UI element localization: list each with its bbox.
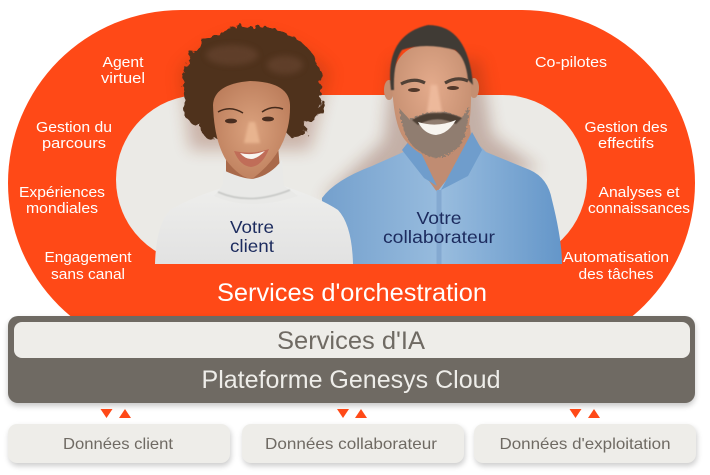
heading: services d'orchestration: Services d'orchestration	[217, 279, 487, 307]
nose	[244, 122, 260, 143]
beard	[399, 106, 469, 158]
brows	[218, 108, 283, 113]
arrows: données d'exploitation	[570, 409, 600, 418]
mustache	[412, 112, 462, 125]
panel: données collaborateur: Données collaborateur	[265, 436, 438, 453]
label: votre client: client	[230, 236, 274, 256]
labels: left capabilities: mondiales	[26, 201, 98, 217]
labels: right capabilities: des tâches	[578, 267, 654, 283]
labels: right capabilities: Gestion des	[584, 120, 668, 136]
labels: left capabilities: parcours	[42, 136, 106, 152]
label: votre collaborateur: collaborateur	[383, 227, 495, 247]
ears	[384, 80, 394, 100]
labels: left capabilities: Engagement	[44, 250, 132, 266]
text: services d'IA: Services d'IA	[277, 327, 425, 355]
panel: données d'exploitation	[474, 424, 697, 466]
labels: right capabilities: Automatisation	[563, 250, 669, 266]
person: collaborateur	[320, 25, 562, 264]
nose	[427, 85, 442, 112]
labels: right capabilities: Analyses et	[598, 185, 680, 201]
sweater	[155, 198, 353, 264]
neck	[422, 125, 471, 192]
mouth	[418, 120, 456, 135]
people photographs	[155, 25, 562, 264]
labels: left capabilities	[19, 55, 145, 283]
eyes	[225, 119, 237, 123]
label: votre client: Votre	[230, 217, 274, 237]
labels: right capabilities	[535, 55, 690, 283]
panel: données client	[8, 424, 231, 466]
labels: left capabilities: Agent	[102, 55, 144, 71]
labels: right capabilities: effectifs	[598, 136, 654, 152]
brows	[401, 79, 468, 84]
neck	[226, 150, 280, 179]
labels: right capabilities: Co-pilotes	[535, 55, 607, 71]
collar	[402, 132, 482, 190]
face	[392, 44, 471, 158]
shirt	[322, 136, 562, 264]
panel: données client: Données client	[63, 436, 174, 453]
labels: left capabilities: virtuel	[101, 71, 145, 87]
person: client	[155, 26, 353, 264]
panel: données d'exploitation: Données d'exploitation	[500, 436, 670, 453]
arrows: données client	[100, 409, 131, 418]
turtleneck	[226, 163, 280, 186]
label: votre collaborateur	[383, 208, 495, 247]
eyes	[408, 88, 420, 92]
labels: left capabilities: Gestion du	[36, 120, 112, 136]
panel: inner background	[116, 95, 587, 264]
panel: services d'IA	[14, 322, 690, 358]
face	[213, 81, 290, 179]
labels: right capabilities: connaissances	[588, 201, 690, 217]
hair highlights	[206, 45, 303, 74]
panel: données collaborateur	[242, 424, 465, 466]
arrows: données collaborateur	[337, 409, 367, 418]
text: plateforme genesys cloud: Plateforme Genesys Cloud	[202, 366, 500, 394]
labels: left capabilities: sans canal	[51, 267, 125, 283]
label: votre client	[230, 217, 274, 256]
panel: services d'orchestration ring	[8, 10, 695, 316]
labels: left capabilities: Expériences	[19, 185, 105, 201]
hair	[182, 26, 322, 139]
placket	[436, 190, 442, 264]
mouth	[234, 149, 269, 167]
panel: plateforme genesys cloud	[8, 316, 695, 406]
label: votre collaborateur: Votre	[416, 208, 462, 228]
hair	[390, 25, 473, 90]
